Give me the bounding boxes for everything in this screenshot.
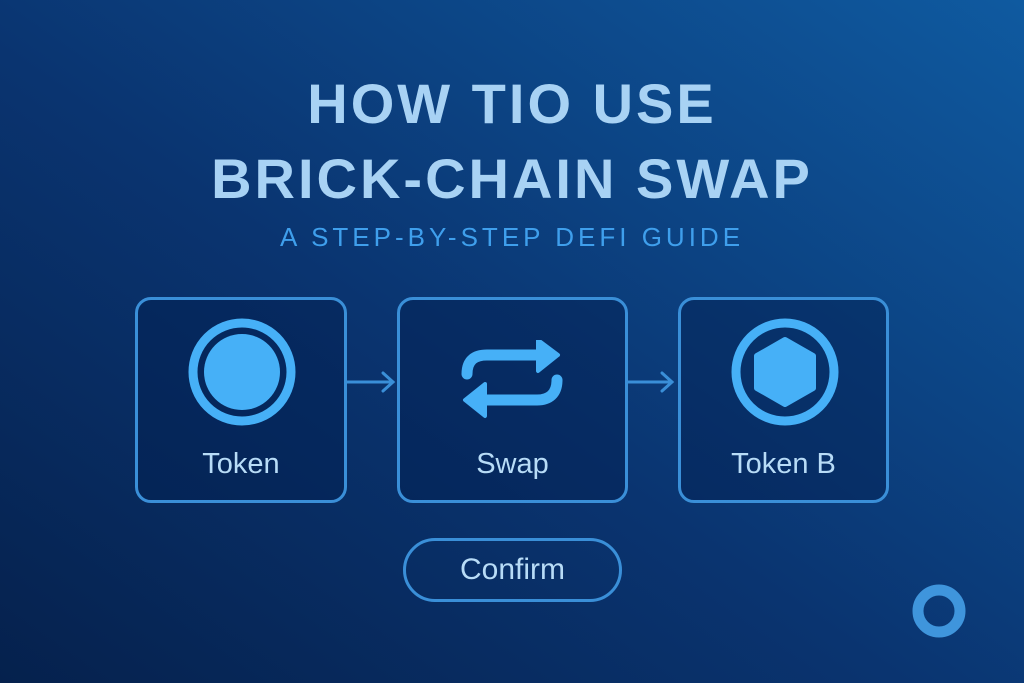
panel: swap — [397, 297, 628, 503]
panel: token B — [678, 297, 889, 503]
icon: swap arrows — [462, 340, 562, 418]
icon: token coin — [188, 318, 296, 426]
label: Token: Token — [202, 448, 280, 480]
label: Swap: Swap — [476, 448, 549, 480]
button: confirm: Confirm — [460, 553, 565, 586]
icon: hexagon token — [732, 318, 838, 426]
title — [211, 72, 813, 210]
label: Token B: Token B — [731, 448, 836, 480]
button: confirm — [403, 538, 622, 602]
title: HOW TIO USE — [307, 72, 717, 135]
title: BRICK-CHAIN SWAP — [211, 147, 813, 210]
panel: token — [135, 297, 347, 503]
arrow 2 — [628, 371, 674, 393]
icon: ring logo — [912, 584, 966, 638]
subtitle: A STEP-BY-STEP DEFI GUIDE — [280, 222, 744, 252]
arrow 1 — [347, 371, 396, 393]
